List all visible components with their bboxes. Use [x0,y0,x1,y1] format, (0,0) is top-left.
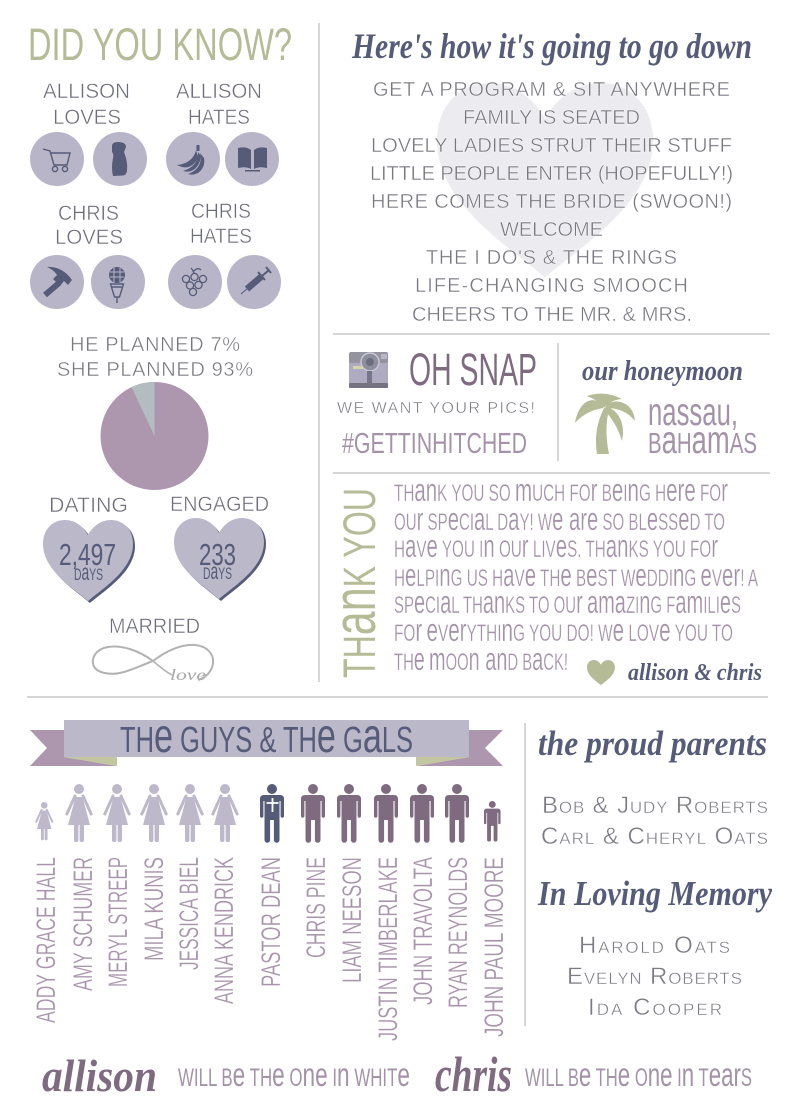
text: thank you message: OUr SPeCIaL DaY! We are SO BLeSSeD TO [394,501,725,537]
heart: engaged days [170,493,269,601]
panel: footer [42,1046,752,1102]
text: party names: ANNA KENDRICK [209,857,239,1004]
icon: olive heart [587,660,615,685]
text: destination: BaHamAS [648,419,757,462]
text: party names: RYAN REYNOLDS [443,857,473,1008]
text: memorial names [567,932,742,1021]
heading: thank you: THanK YOU [320,488,388,678]
figure: pastor [260,784,284,843]
heading: did you know: DID YOU KNOW? [28,19,292,70]
banner: the guys and the gals [30,709,503,766]
panel: thank you [320,472,762,686]
label: married: MARRIED [109,615,200,638]
icon: bananas [166,132,220,186]
chart: planning pie [100,382,208,490]
text: parents names: Carl & Cheryl Oats [541,823,768,850]
text: party names: AMY SCHUMER [68,857,98,991]
panel: oh snap [337,344,537,460]
heart: engaged days: ENGAGED [170,493,269,516]
text: will be the one in tears: WILL Be THe One In TearS [525,1057,752,1094]
label: chris hates: HATES [190,225,252,248]
text: ceremony steps: LITTLE PEOPLE ENTER (HOPEFULLY!) [370,163,733,185]
text: parents names: Bob & Judy Roberts [542,792,768,819]
text: ceremony steps: LOVELY LADIES STRUT THEIR STUFF [371,135,732,157]
text: destination: nassau, [648,391,738,434]
text: allison: allison [42,1050,157,1101]
text: party names: JUSTIN TIMBERLAKE [373,857,403,1041]
heart: dating days: DATING [49,494,128,517]
figures: groomsmen [301,784,501,843]
text: parents names [541,792,768,850]
heart: engaged days: DaYS [203,558,232,584]
heart: dating days: 2,497 [59,537,116,572]
text: party names: LIAM NEESON [337,857,367,983]
text: party names: CHRIS PINE [301,857,331,958]
label: planning split [57,334,253,381]
text: ceremony steps: LIFE-CHANGING SMOOCH [415,275,688,297]
text: party names: MERYL STREEP [103,857,133,987]
text: thank you message [394,472,758,677]
icon: grapes [168,255,222,309]
heart: dating days: DaYS [74,559,103,585]
icon: hammer [30,255,84,309]
text: destination [648,391,757,462]
heart: dating days [43,494,135,603]
icon: book [225,132,279,186]
figures: bridal party [36,784,237,842]
text: party names: ADDY GRACE HALL [31,857,61,1023]
label: allison loves: LOVES [53,106,121,129]
text: memorial names: Ida Cooper [588,994,722,1021]
label: allison hates: HATES [188,106,250,129]
label: planning split: SHE PLANNED 93% [57,359,253,381]
text: we want your pics: WE WANT YOUR PICS! [337,400,535,417]
icon: dog [93,132,147,186]
text: ceremony steps [370,79,733,326]
text: party names: PASTOR DEAN [256,857,286,987]
icon: shopping cart [30,132,84,186]
text: ceremony steps: CHEERS TO THE MR. & MRS. [412,304,692,326]
label: chris loves: LOVES [55,226,123,249]
panel: honeymoon [575,355,757,462]
text: signature: allison & chris [628,660,762,686]
text: memorial names: Harold Oats [579,932,730,959]
text: party names: JOHN TRAVOLTA [408,857,438,1005]
text: thank you message: HaVe YOU In OUr LIVeS. THanKS YOU FOr [394,528,718,564]
text: party names: MILA KUNIS [139,857,169,961]
icon: palm tree [575,394,635,454]
banner: the guys and the gals: THe GUYS & THe GaLS [120,709,413,763]
panel: order of ceremony [351,26,752,326]
text: memorial names: Evelyn Roberts [567,963,742,990]
label: allison loves [43,80,130,129]
text: ceremony steps: GET A PROGRAM & SIT ANYWHERE [373,79,730,101]
heading: our honeymoon: our honeymoon [582,355,743,387]
text: thank you message: THe mOOn anD BaCK! [394,641,568,677]
text: hashtag: #GETTINHITCHED [342,428,527,460]
label: chris loves: CHRIS [58,202,119,225]
text: ceremony steps: WELCOME [500,219,603,241]
icon: instant camera [349,352,388,388]
panel: did you know [28,19,292,684]
label: chris hates [190,200,252,248]
icon: microphone [91,255,145,309]
panel: parents and memory [537,724,772,1021]
text: party names: JESSICA BIEL [174,857,204,970]
icon: infinity love [93,645,213,684]
text: party names [31,857,509,1041]
text: thank you message: SPeCIaL THanKS TO OUr amaZInG FamILIeS [394,584,741,620]
panel: wedding party [30,709,509,1041]
label: allison loves: ALLISON [43,80,130,103]
text: thank you message: HeLPInG US HaVe THe BeST WeDDInG eVer! A [394,557,758,593]
label: chris hates: CHRIS [191,200,251,223]
heading: oh snap: OH SNAP [409,344,537,395]
heart: background [437,83,653,277]
text: chris: chris [435,1046,512,1102]
icon: syringe [227,255,281,309]
label: allison hates: ALLISON [176,80,262,103]
text: thank you message: FOr eVerYTHInG YOU DO! We LOVe YOU TO [394,612,733,648]
label: planning split: HE PLANNED 7% [70,334,240,356]
label: allison hates [176,80,262,129]
text: ceremony steps: FAMILY IS SEATED [463,107,640,129]
text: thank you message: THanK YOU SO mUCH FOr BeInG Here FOr [394,472,728,508]
label: chris loves [55,202,123,249]
text: ceremony steps: THE I DO'S & THE RINGS [426,247,677,269]
text: ceremony steps: HERE COMES THE BRIDE (SWOON!) [371,191,732,213]
heart: engaged days: 233 [199,537,236,572]
text: will be the one in white: WILL Be THe One In WHITe [178,1057,410,1094]
icon: infinity love: love [170,667,206,684]
text: party names: JOHN PAUL MOORE [479,857,509,1037]
heading: the proud parents: the proud parents [538,724,767,763]
